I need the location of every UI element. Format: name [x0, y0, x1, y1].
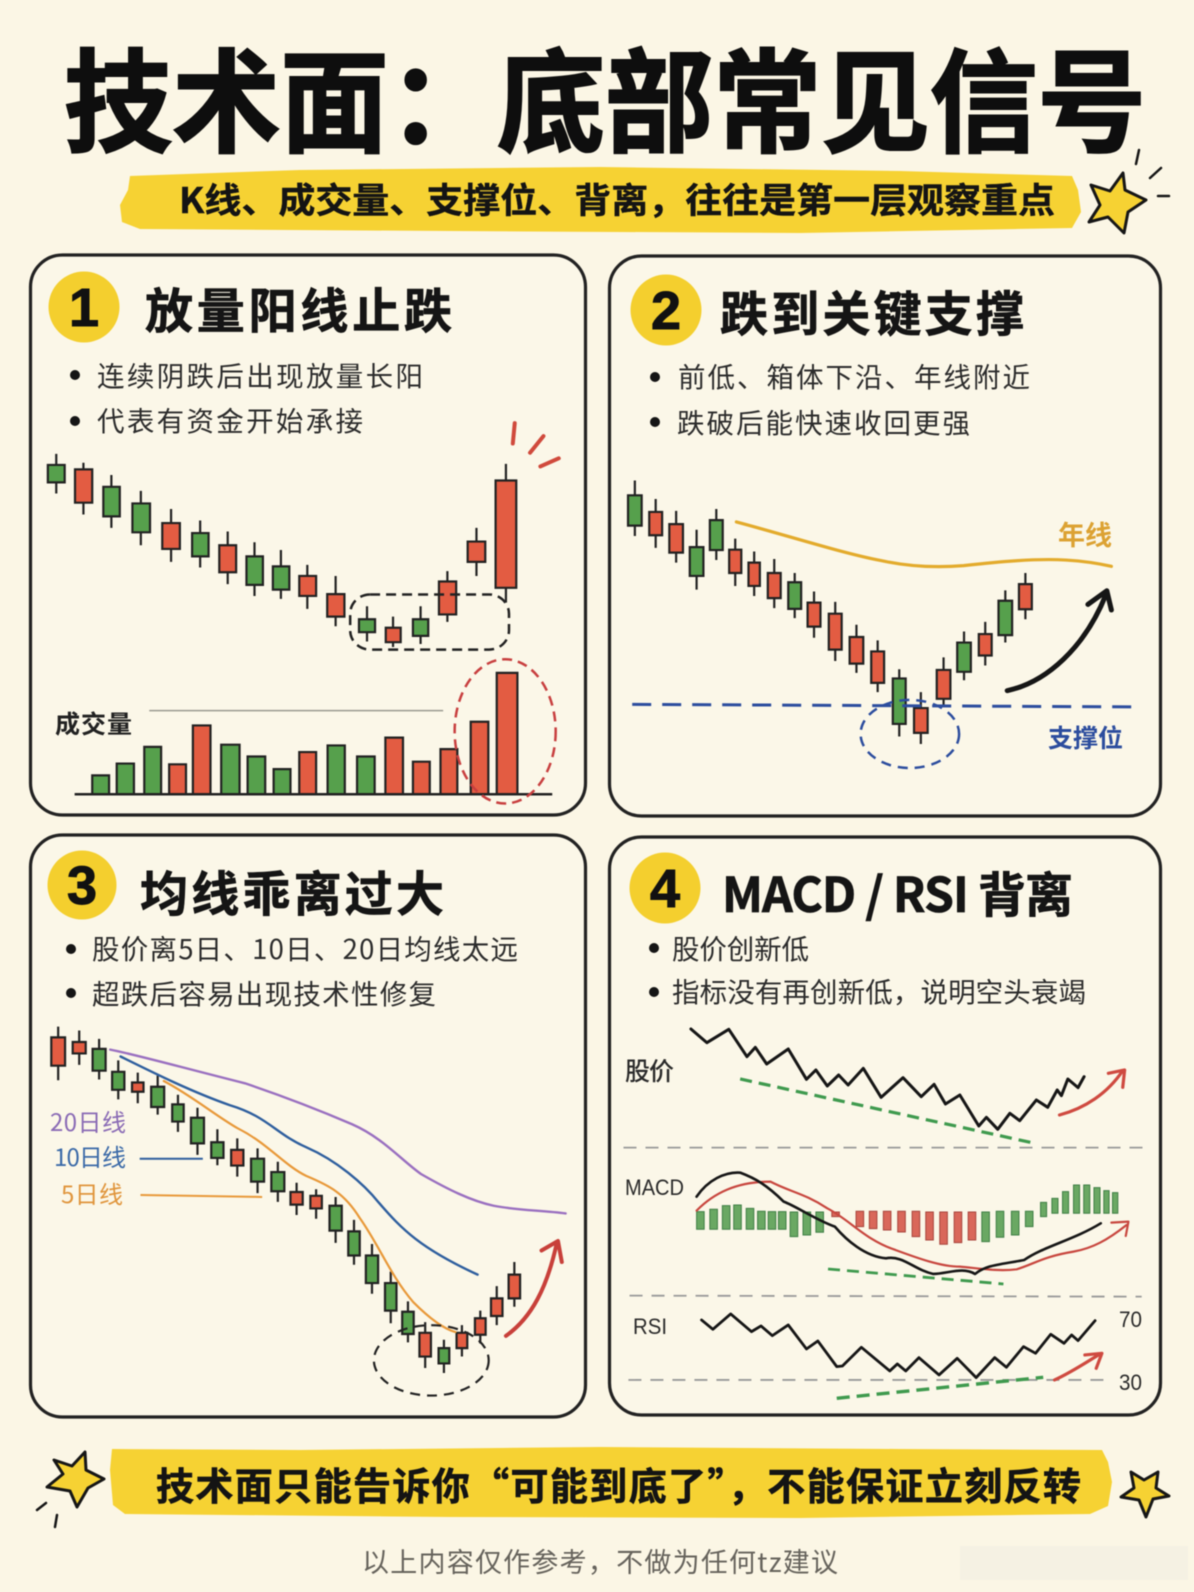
bullet 2: 代表有资金开始承接 [97, 399, 363, 439]
bottom banner: 技术面只能告诉你“可能到底了”，不能保证立刻反转 [156, 1456, 1081, 1511]
icon: star bottom right [1121, 1472, 1169, 1517]
heading: 跌到关键支撑 [720, 275, 1024, 345]
subtitle banner [120, 167, 1081, 233]
heading: MACD / RSI 背离 [722, 856, 1073, 926]
title: 技术面：底部常见信号 [64, 14, 1146, 176]
label: MACD: MACD [625, 1175, 684, 1200]
candlestick chart [48, 423, 559, 650]
volume label: 成交量 [55, 705, 132, 741]
label: 股价: 股价 [625, 1052, 674, 1088]
label: 10日线: 10日线 [54, 1138, 126, 1173]
label: 70: 70 [1119, 1307, 1142, 1332]
number badge 3: 3 [67, 856, 97, 916]
heading: 放量阳线止跌 [145, 272, 452, 342]
disclaimer: 以上内容仅作参考，不做为任何tz建议 [362, 1541, 838, 1580]
candlestick chart with moving averages [51, 1027, 566, 1396]
subtitle banner: K线、成交量、支撑位、背离，往往是第一层观察重点 [179, 173, 1055, 224]
volume bar chart [75, 659, 556, 804]
label: 20日线: 20日线 [50, 1103, 126, 1138]
number badge 4: 4 [650, 859, 680, 919]
MACD chart [630, 1173, 1142, 1297]
panel: 1 放量阳线止跌 [30, 255, 586, 815]
label: 30: 30 [1119, 1370, 1142, 1395]
faint watermark [960, 1546, 1188, 1580]
number badge 2: 2 [651, 281, 681, 341]
number badge 4 [630, 852, 700, 924]
candlestick chart with support and annual line [628, 480, 1138, 768]
panel: 3 均线乖离过大 [30, 835, 586, 1417]
bullet 1: 股价创新低 [672, 927, 809, 967]
label: 支撑位: 支撑位 [1048, 719, 1123, 755]
price chart [623, 1029, 1145, 1148]
icon: star bottom left [37, 1452, 104, 1527]
bullet 1: 前低、箱体下沿、年线附近 [678, 355, 1030, 395]
panel: 2 跌到关键支撑 [610, 256, 1160, 816]
panel: 4 MACD / RSI 背离 [610, 837, 1160, 1415]
label: RSI: RSI [633, 1314, 667, 1339]
bullet 2: 跌破后能快速收回更强 [677, 401, 970, 441]
RSI chart [628, 1314, 1104, 1398]
icon: star top right [1089, 150, 1169, 233]
number badge 2 [630, 274, 702, 346]
label: 5日线: 5日线 [61, 1175, 123, 1210]
number badge 1: 1 [69, 278, 99, 338]
heading: 均线乖离过大 [140, 855, 444, 925]
bullet 1: 连续阴跌后出现放量长阳 [97, 354, 423, 394]
bullet 2: 超跌后容易出现技术性修复 [92, 972, 436, 1012]
label: 年线: 年线 [1058, 514, 1112, 553]
number badge 3 [48, 850, 116, 920]
bullet 2: 指标没有再创新低，说明空头衰竭 [672, 970, 1086, 1010]
bullet 1: 股价离5日、10日、20日均线太远 [92, 927, 518, 967]
number badge 1 [48, 272, 120, 342]
